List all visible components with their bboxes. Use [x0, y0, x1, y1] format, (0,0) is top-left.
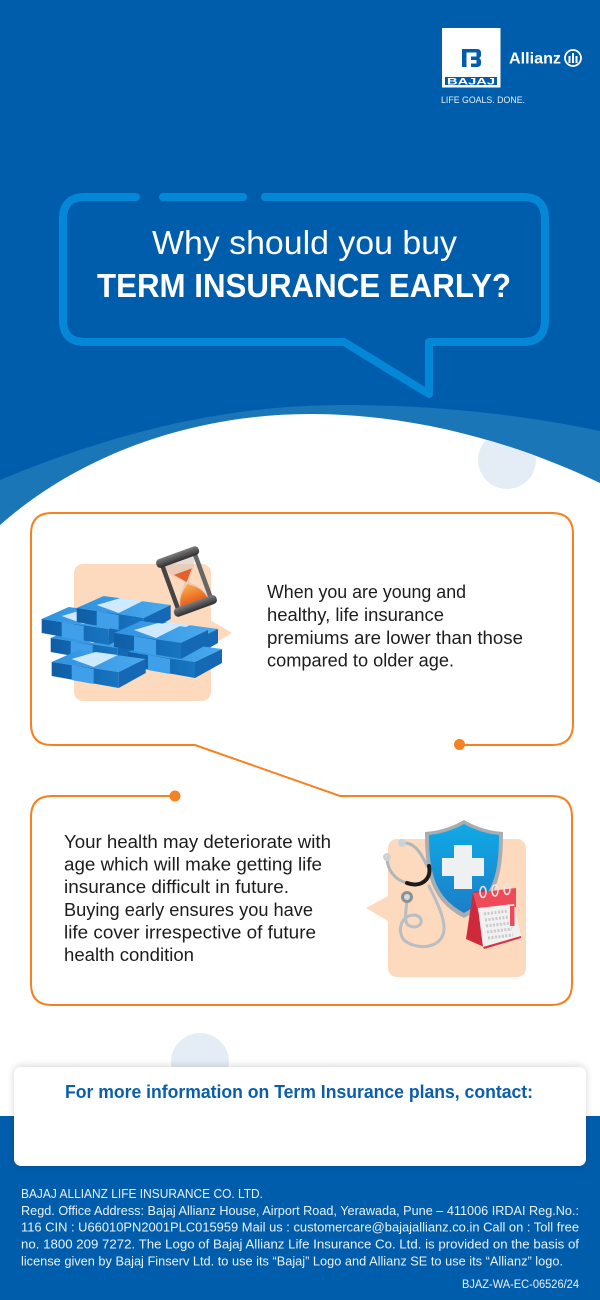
contact card shadow	[14, 1066, 586, 1166]
text block: health: life cover irrespective of future	[64, 922, 316, 942]
text block: premiums	[267, 582, 523, 670]
text block: health: Your health may deteriorate with	[64, 832, 331, 852]
footer background	[0, 1116, 600, 1300]
logo: Bajaj Allianz: LIFE GOALS. DONE.	[441, 95, 525, 106]
text block: health: insurance difficult in future.	[64, 877, 289, 897]
title line 2: TERM INSURANCE EARLY?	[97, 267, 511, 304]
text block: premiums: premiums are lower than those	[267, 628, 523, 648]
text block: health: Buying early ensures you have	[64, 900, 313, 920]
panel: connected orange card outlines	[31, 513, 573, 1005]
contact card	[14, 1067, 586, 1166]
footer disclaimer: Regd. Office Address: Bajaj Allianz House, Airport Road, Yerawada, Pune – 411006 IRDAI Reg.No.:	[21, 1204, 579, 1218]
icon: shield, stethoscope and calendar	[366, 820, 526, 977]
footer disclaimer: BJAZ-WA-EC-06526/24	[462, 1279, 580, 1291]
title line 1: Why should you buy	[152, 224, 458, 261]
text block: premiums: When you are young and	[267, 582, 466, 602]
light blue wave band	[0, 405, 600, 560]
footer disclaimer: 116 CIN : U66010PN2001PLC015959 Mail us : customercare@bajajallianz.co.in Call on : Toll free	[21, 1220, 579, 1234]
text block: premiums: compared to older age.	[267, 650, 454, 670]
logo: Bajaj Allianz: Allianz	[509, 50, 561, 68]
footer disclaimer: no. 1800 209 7272. The Logo of Bajaj Allianz Life Insurance Co. Ltd. is provided on the basis of	[21, 1238, 580, 1252]
contact card: For more information on Term Insurance plans, contact:	[65, 1082, 533, 1102]
text block: health: health condition	[64, 945, 194, 965]
text block: premiums: healthy, life insurance	[267, 605, 444, 625]
header background	[0, 0, 600, 560]
text block: health	[64, 832, 331, 965]
footer disclaimer: license given by Bajaj Finserv Ltd. to use its “Bajaj” Logo and Allianz SE to use its “Allianz” logo.	[21, 1254, 563, 1268]
decorative circle bottom	[171, 1033, 229, 1091]
footer disclaimer: BAJAJ ALLIANZ LIFE INSURANCE CO. LTD.	[21, 1187, 263, 1201]
title speech bubble	[63, 197, 545, 394]
logo: Bajaj Allianz: BAJAJ	[447, 76, 495, 86]
decorative circle top	[478, 440, 536, 489]
white page body	[0, 414, 600, 1300]
text block: health: age which will make getting life	[64, 854, 322, 874]
footer disclaimer	[21, 1187, 580, 1291]
icon: money stacks and hourglass	[42, 545, 232, 701]
logo: Bajaj Allianz	[441, 28, 581, 106]
